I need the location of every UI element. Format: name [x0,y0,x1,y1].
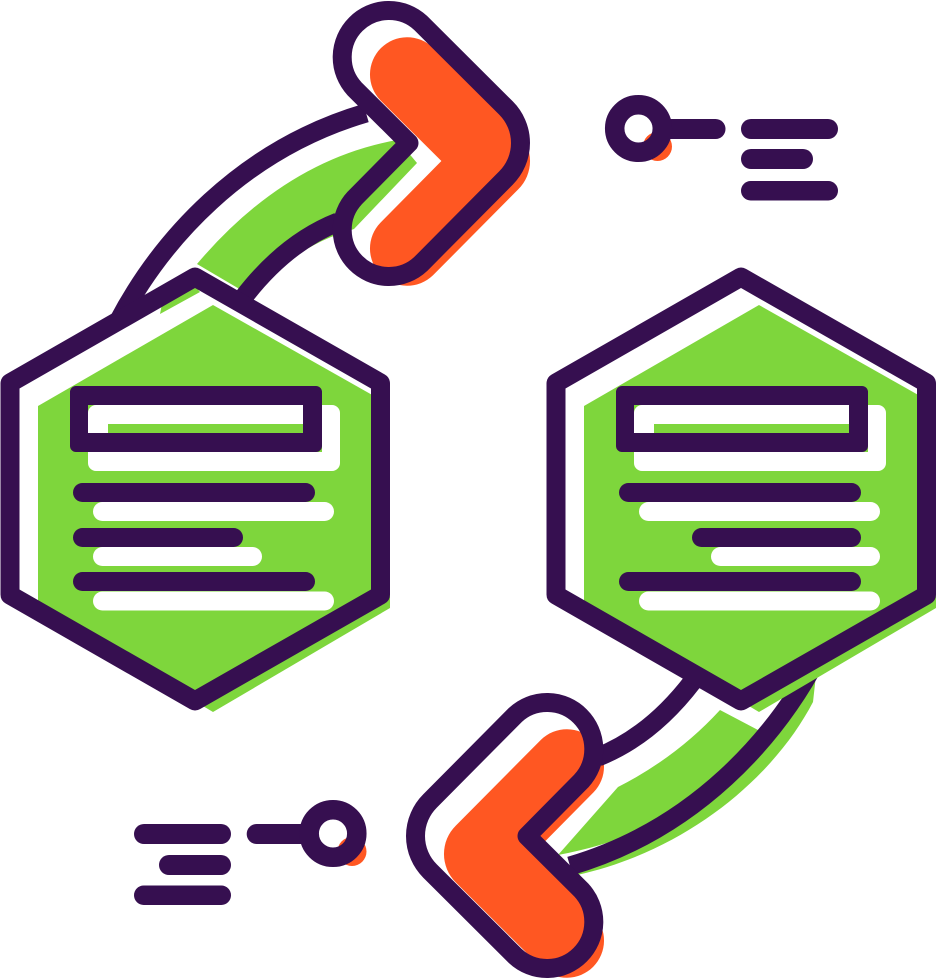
icon: pin stem, top right [660,119,726,139]
hexagon green fill: right [584,305,936,712]
icon: pin ring, bottom left [309,810,357,857]
hexagon outline: left [0,268,390,710]
icon: pin orange dot, bottom left [338,837,366,866]
callout: bottom left pin and text lines [134,810,366,905]
icon: pin ring, top right [615,105,662,152]
text line white shadows: left [93,502,334,610]
icon: pin stem, bottom left [247,824,312,844]
text line white shadows: right [639,502,880,610]
title box outline: right [616,386,868,452]
arrow shaft green fill: top [197,140,417,297]
title box white shadow: left [88,405,340,471]
arrow head orange fill: bottom [444,729,604,978]
text lines: right [619,483,861,591]
arrow head outline: bottom [416,703,594,968]
arrow: bottom curved arrow [416,657,818,978]
arrow head outline: top [342,11,520,276]
text lines: left [73,483,315,591]
arrow shaft green sliver inside hexagon: top [160,286,200,314]
callout: top right pin and text lines [615,105,838,200]
panel: left hexagon card [0,268,390,712]
arrow shaft outer line: bottom [570,657,818,866]
hexagon outline: right [546,268,936,710]
arrow: top curved arrow [118,11,530,322]
arrow shaft outer line: top [118,113,366,322]
arrow shaft green shadow: bottom [570,657,818,875]
arrow shaft inner line: top [243,222,338,298]
title box outline: left [70,386,322,452]
title box white shadow: right [634,405,886,471]
panel: right hexagon card [546,268,936,712]
hexagon green fill: left [38,305,390,712]
arrow head orange fill: top [370,37,530,286]
text lines: bottom left callout [134,824,231,905]
arrow shaft green fill: bottom [558,690,800,855]
icon: pin orange dot, top right [643,132,672,161]
text lines: top right callout [741,119,838,200]
arrow shaft inner line: bottom [598,681,693,757]
